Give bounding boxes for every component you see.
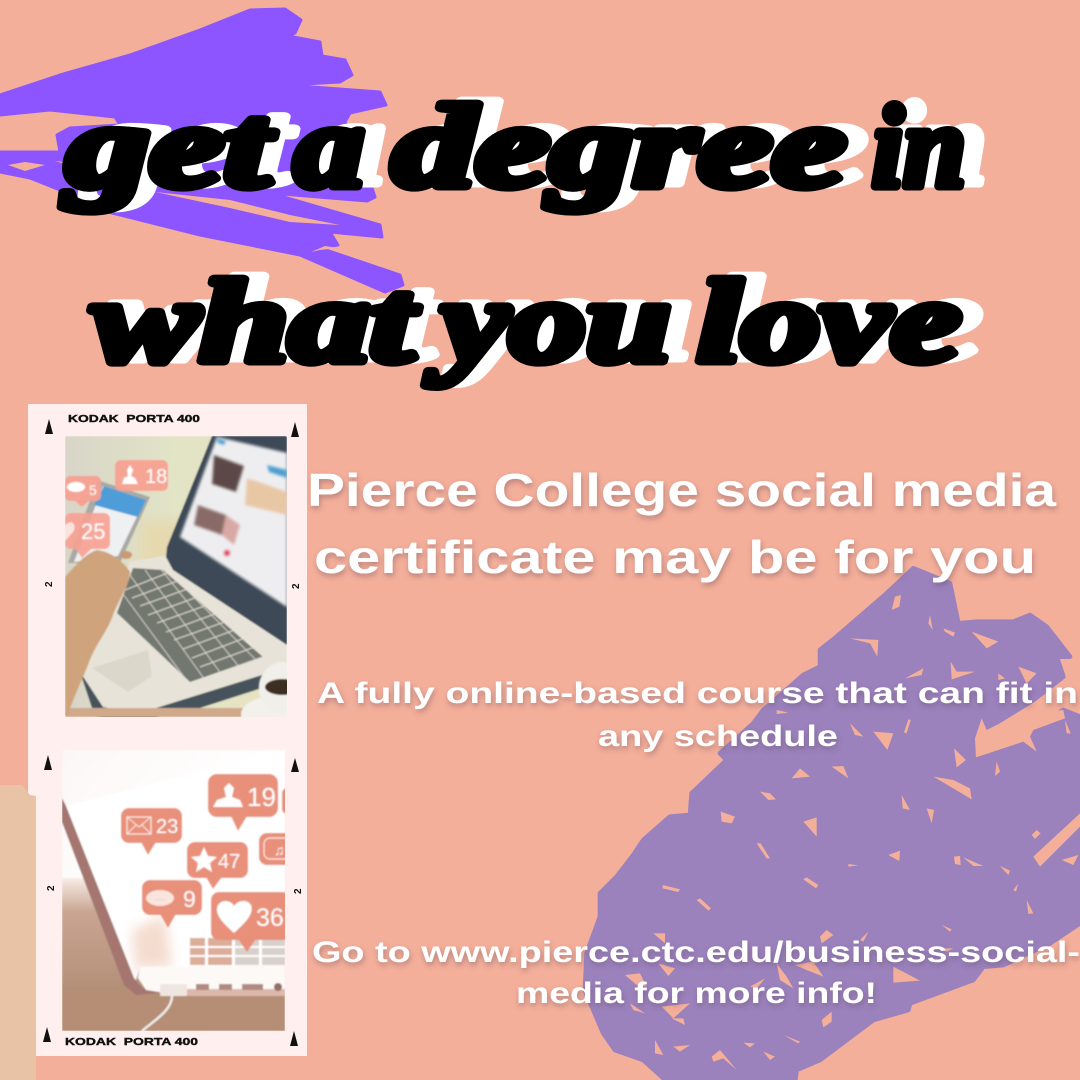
icon music: ♫ [274,842,284,858]
title white shadow: in [892,78,986,209]
film registration marks: 2 [44,581,55,587]
heading: Pierce College social media certificate [307,464,1057,583]
icon 19: 19 [247,782,276,812]
phone [68,480,150,563]
title white shadow: get [82,78,295,209]
heading: Pierce College social media certificate: certificate may be for you [314,531,1036,583]
film registration marks: 2 [291,583,302,589]
text block: website link [312,936,1080,1010]
title black text [62,81,966,387]
beige tape [0,785,36,1080]
title black text: in [872,81,966,212]
icon 36 [211,892,291,952]
text block: website link: Go to www.pierce.ctc.edu/business-social- [312,936,1080,969]
title white shadow [82,78,986,384]
film strip panel [28,404,333,1056]
title: get a degree in what you love [62,78,986,387]
title black text: love [697,256,961,387]
icon 47: 47 [218,851,240,873]
icon 47 [187,842,248,889]
title black text: what [92,256,418,387]
keyboard [117,568,268,685]
icon 36: 36 [256,904,284,932]
icon 9 [142,880,202,928]
notification 5: 5 [89,482,97,498]
title white shadow: you [445,253,691,384]
icon 9: ..... [155,895,165,902]
film label bottom: KODAK PORTA 400 [65,1036,198,1048]
title black text: you [425,256,671,387]
notification 5 [65,476,101,507]
title black text: get [62,81,275,212]
title white shadow: a [314,78,384,209]
icon music [258,832,285,866]
notification 25 [65,513,110,558]
lavender paint splash [585,568,1080,1080]
film registration marks: 2 [46,885,57,891]
photo: laptop with social icons [62,750,299,1031]
title white shadow: what [112,253,438,384]
title white shadow: degree [412,78,866,209]
title black text: a [294,81,364,212]
text block: online course: any schedule [598,720,838,753]
laptop lid [166,436,287,645]
icon 9: 9 [183,886,196,912]
film registration marks: 2 [293,888,304,894]
notification 18 [115,460,168,491]
icon 23 [121,808,182,855]
purple brush stroke behind title [0,9,403,292]
photo: laptop and phone with notifications [65,436,287,717]
heading: Pierce College social media certificate: Pierce College social media [307,464,1057,516]
cup [240,698,287,717]
title white shadow: love [717,253,981,384]
text block: online course [317,677,1078,753]
notification 18: 18 [145,466,167,488]
laptop lid back [94,878,153,981]
text block: online course: A fully online-based course that can fit in [317,677,1078,710]
laptop base [137,966,168,994]
icon 23: 23 [156,816,178,838]
laptop edge [62,798,159,995]
hand [65,550,130,717]
title black text: degree [392,81,846,212]
laptop base [80,555,287,714]
text block: website link: media for more info! [516,977,877,1010]
keyboard keys [190,938,285,965]
notification 25: 25 [81,519,105,544]
icon 19 [208,774,278,831]
film label top: KODAK PORTA 400 [68,413,200,425]
film registration marks [43,419,304,1046]
